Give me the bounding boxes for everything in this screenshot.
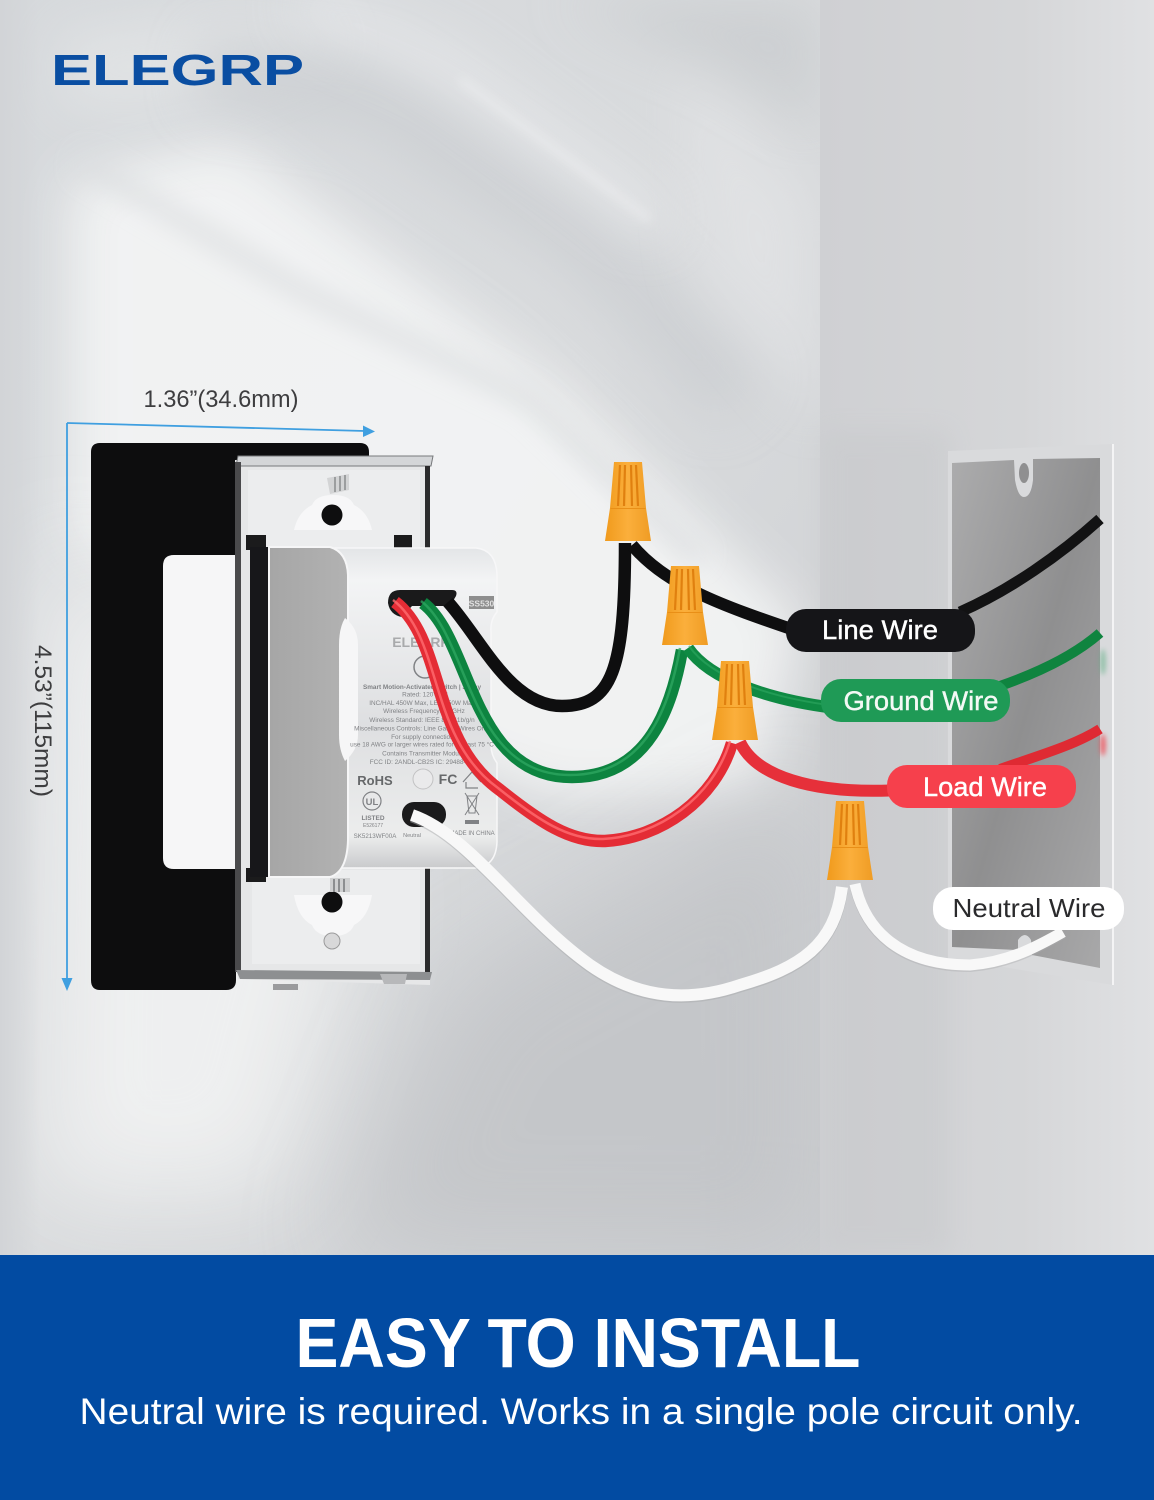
switch: printed label: Rated: 120V AC — [402, 692, 448, 698]
logo: ELEGRP: ELEGRP — [51, 46, 304, 95]
switch: printed label: FC — [439, 771, 457, 787]
switch: printed label: Neutral — [403, 833, 421, 839]
wire: load (red) — [393, 600, 1100, 841]
banner subheading: Neutral wire is required. Works in a single pole circuit only. — [80, 1391, 1082, 1432]
switch: printed label: For supply connections — [391, 734, 457, 741]
wall plate — [91, 443, 369, 990]
dimension: width — [67, 386, 375, 437]
label: neutral wire: Neutral Wire — [952, 893, 1106, 923]
switch: printed label: use 18 AWG or larger wires rated for at least 75 °C — [350, 740, 494, 748]
label: ground wire: Ground Wire — [844, 686, 998, 716]
switch: printed label: RoHS — [357, 773, 393, 788]
wire: neutral (white) — [412, 815, 1063, 997]
dimension: height: 4.53”(115mm) — [29, 645, 56, 797]
wire nut: neutral — [827, 801, 873, 880]
label: load wire — [887, 765, 1076, 808]
label: line wire: Line Wire — [822, 615, 938, 645]
switch: printed label: Wireless Standard: IEEE 802.11b/g/n — [369, 717, 475, 724]
switch: mounting strap — [235, 456, 433, 990]
switch: printed label: E526177 — [363, 823, 383, 829]
switch: printed label: LISTED — [361, 815, 385, 822]
switch: printed label — [350, 634, 495, 840]
label: load wire: Load Wire — [923, 772, 1047, 802]
banner heading: EASY TO INSTALL — [296, 1304, 860, 1382]
footer banner — [0, 1255, 1154, 1500]
wire nut: load — [712, 661, 758, 740]
switch: printed label: UL — [366, 797, 379, 808]
switch: printed label: Contains Transmitter Module — [382, 750, 464, 758]
switch: printed label: MADE IN CHINA — [449, 831, 495, 837]
switch: back housing: SS530 — [469, 598, 495, 608]
wire: line (black) — [448, 519, 1100, 706]
electrical box — [948, 444, 1113, 985]
dimension: width: 1.36”(34.6mm) — [144, 386, 298, 413]
switch: printed label: INC/HAL 450W Max, LED 150W Max — [369, 700, 476, 707]
dimension: height — [29, 423, 72, 991]
label: neutral wire — [933, 887, 1124, 930]
switch: printed label: Smart Motion-Activated Switch | 3-Way — [363, 684, 481, 691]
switch: printed label: ELEGRP — [392, 634, 450, 650]
label: line wire — [786, 609, 975, 652]
switch: printed label: Miscellaneous Controls: Line Gauge Wires Only — [354, 726, 491, 732]
label: ground wire — [821, 679, 1010, 722]
switch: back housing — [250, 547, 497, 877]
switch: printed label: SK5213WF00A — [354, 833, 397, 840]
switch: printed label: FCC ID: 2ANDL-CB2S IC: 29488-SK — [370, 759, 475, 766]
switch: printed label: Wireless Frequency: 2.4GHz — [383, 708, 465, 715]
wire nut: ground — [662, 566, 708, 645]
wire nut: line — [605, 462, 651, 541]
wire: ground (green) — [421, 601, 1100, 777]
